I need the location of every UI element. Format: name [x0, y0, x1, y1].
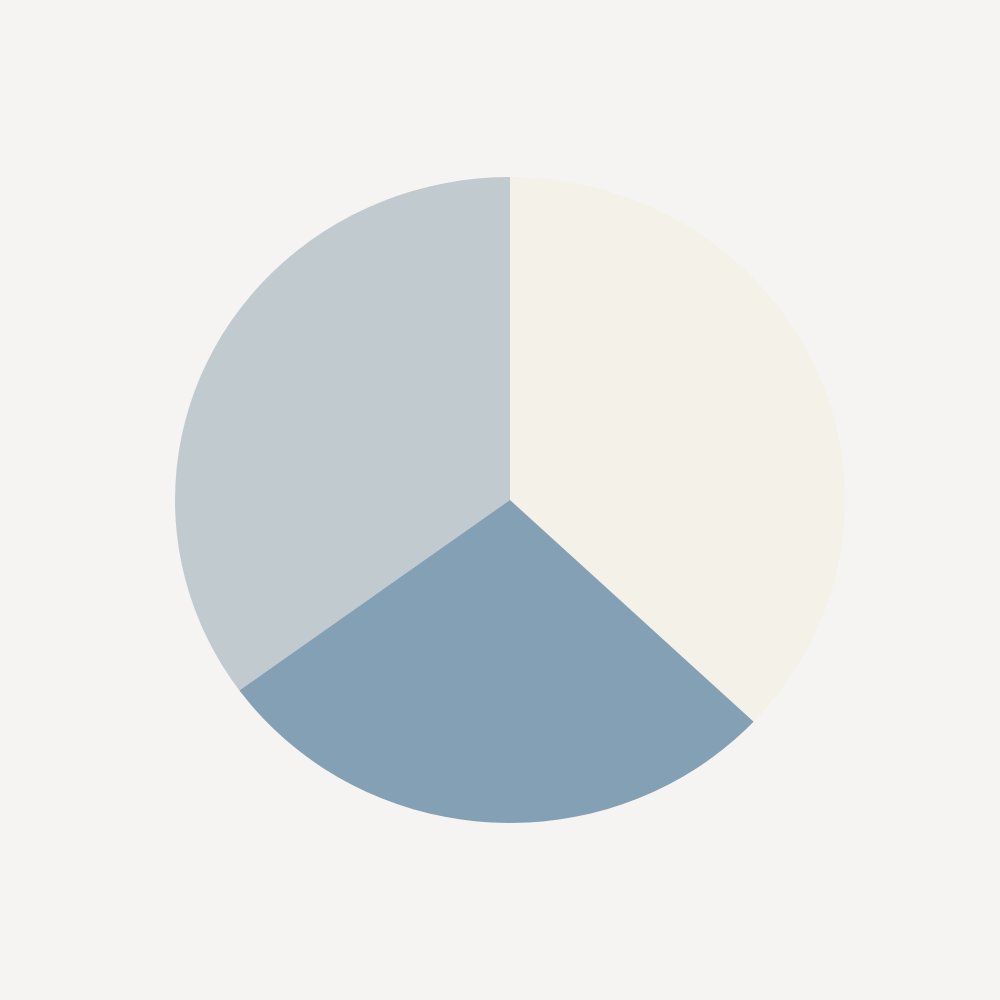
- pie slices: [175, 177, 845, 823]
- slice: right cream: [510, 177, 845, 722]
- slice: left grey: [175, 177, 510, 690]
- pie chart: [175, 177, 845, 823]
- slice: bottom blue: [240, 500, 754, 823]
